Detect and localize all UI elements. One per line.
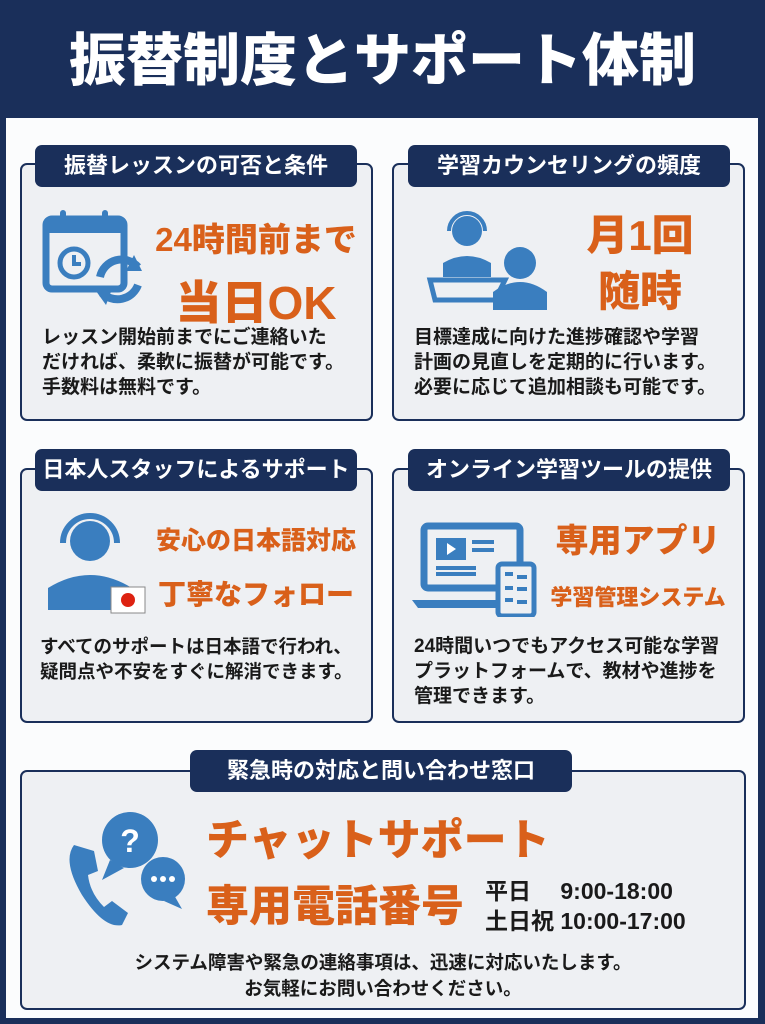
icon: phone chat [70,812,185,926]
highlight: app [550,522,726,610]
tab: online tools: オンライン学習ツールの提供 [426,457,712,482]
panel: japanese staff [20,468,373,723]
highlight: chat phone [206,817,550,931]
text: emergency: システム障害や緊急の連絡事項は、迅速に対応いたします。 [134,952,632,973]
highlight: japanese [156,527,356,610]
highlight: japanese: 丁寧なフォロー [158,579,354,610]
highlight: 24h: 当日OK [176,277,336,329]
text: hours [485,878,686,934]
highlight: monthly: 月1回 [586,212,694,259]
text: online tools: プラットフォームで、教材や進捗を [414,661,717,682]
icon: counselor [426,211,547,310]
text: online tools [414,636,719,707]
tab: japanese staff [35,449,357,491]
text: online tools: 管理できます。 [414,686,545,707]
tab: online tools [408,449,730,491]
highlight: 24h: 24時間前まで [155,221,357,258]
highlight: japanese: 安心の日本語対応 [156,527,356,555]
panel: emergency [20,770,746,1010]
title: 振替制度とサポート体制 [69,29,696,93]
text: reschedule: レッスン開始前までにご連絡いた [42,327,327,348]
text: counseling: 目標達成に向けた進捗確認や学習 [414,327,699,348]
panel: reschedule [20,163,373,421]
panel: online tools [392,468,745,723]
icon: laptop [412,522,536,617]
text: counseling: 必要に応じて追加相談も可能です。 [414,377,716,398]
tab: reschedule [35,145,357,187]
tab: emergency: 緊急時の対応と問い合わせ窓口 [227,758,535,783]
highlight: chat phone: 専用電話番号 [206,883,464,931]
text: reschedule [42,326,344,398]
highlight: monthly: 随時 [598,268,682,315]
tab: reschedule: 振替レッスンの可否と条件 [64,153,328,178]
text: japanese staff: 疑問点や不安をすぐに解消できます。 [40,661,353,682]
panel: counseling [392,163,745,421]
highlight: app: 専用アプリ [556,522,720,559]
highlight: app: 学習管理システム [550,585,726,610]
text: hours: 平日 9:00-18:00 [485,878,673,904]
icon: operator [48,513,146,614]
text: reschedule: 手数料は無料です。 [42,377,211,398]
highlight: 24h [155,221,357,329]
tab: counseling: 学習カウンセリングの頻度 [437,153,701,178]
tab: counseling [408,145,730,187]
tab: japanese staff: 日本人スタッフによるサポート [42,457,350,482]
text: emergency: お気軽にお問い合わせください。 [244,978,522,999]
text: hours: 土日祝 10:00-17:00 [485,908,686,934]
text: counseling [414,326,716,398]
icon: calendar [42,210,142,305]
text: counseling: 計画の見直しを定期的に行います。 [414,352,716,373]
highlight: chat phone: チャットサポート [206,817,550,865]
text: japanese staff: すべてのサポートは日本語で行われ、 [40,636,352,657]
icon: phone chat: ? [120,823,140,859]
text: emergency [134,952,632,999]
highlight: monthly [586,212,694,315]
tab: emergency [190,750,572,792]
text: japanese staff [40,636,353,682]
text: reschedule: だければ、柔軟に振替が可能です。 [42,352,344,373]
title [0,0,765,118]
text: online tools: 24時間いつでもアクセス可能な学習 [414,636,719,657]
